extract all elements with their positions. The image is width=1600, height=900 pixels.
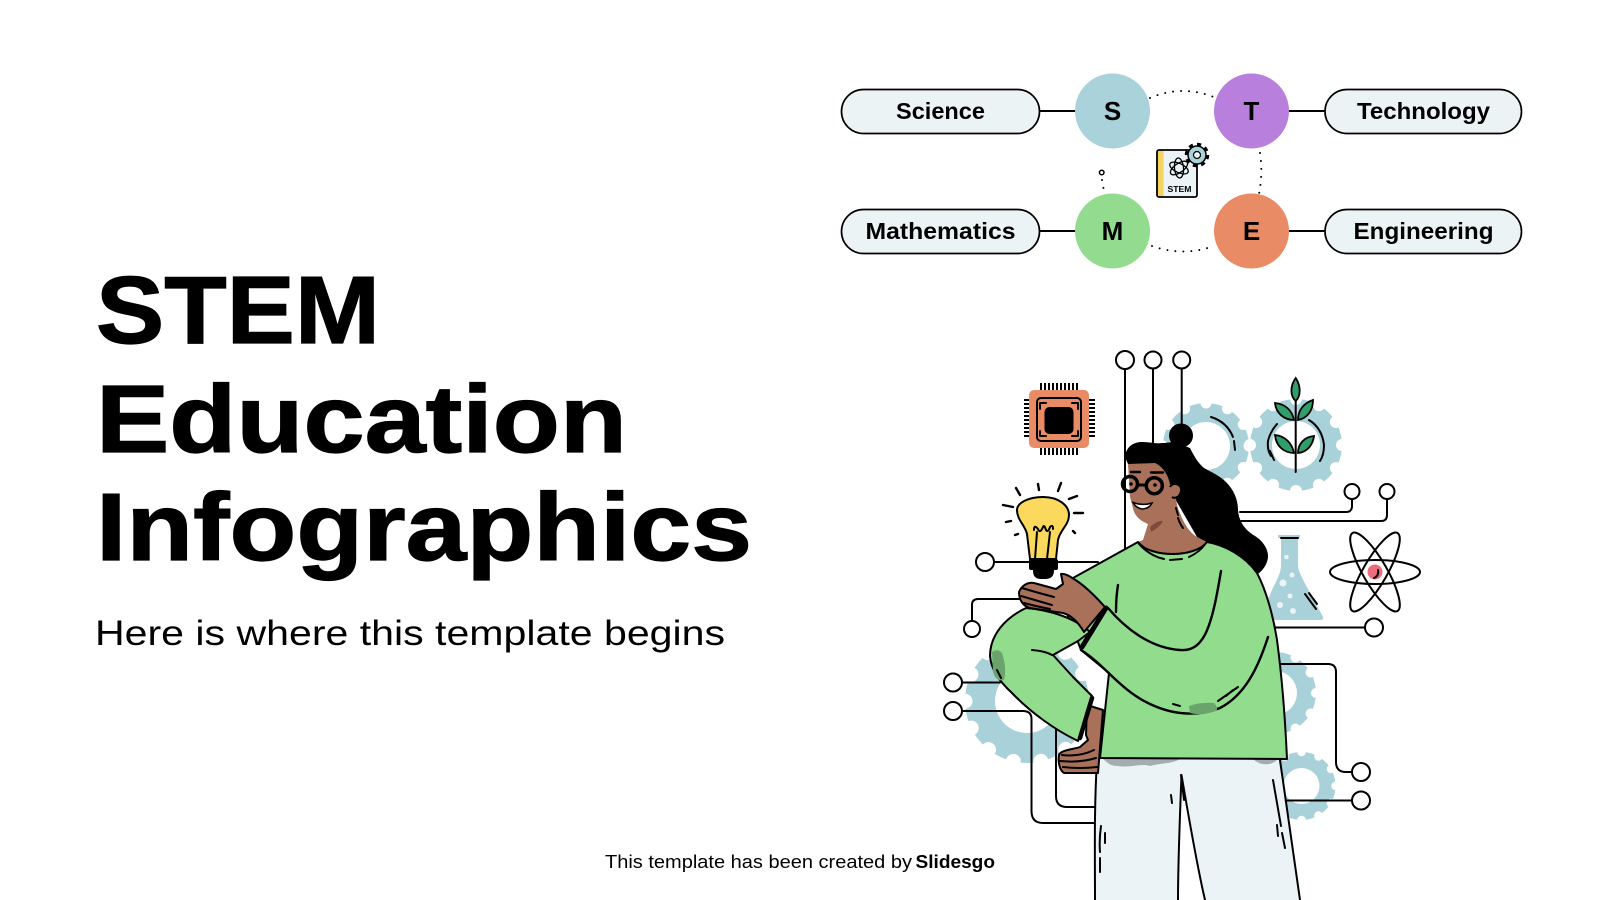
circuit lines and nodes xyxy=(944,351,1394,823)
circle: T xyxy=(1214,74,1289,148)
STEM acronym diagram xyxy=(842,74,1522,268)
person: sleeve fold xyxy=(1108,571,1221,650)
circle: S: S xyxy=(1104,96,1121,126)
footer credit: Slidesgo xyxy=(916,851,995,872)
person: hair bun xyxy=(1169,424,1193,448)
title: Education xyxy=(96,366,627,473)
person: green arm xyxy=(990,608,1092,741)
gear: right lower xyxy=(1268,752,1336,820)
person: neck and face xyxy=(1128,463,1207,554)
person: hair back xyxy=(1125,442,1268,575)
person: pants xyxy=(1095,755,1300,900)
subtitle: Here is where this template begins xyxy=(95,614,725,653)
circle: S xyxy=(1075,74,1150,148)
gear: plant xyxy=(1250,399,1342,491)
gear: upper left xyxy=(1163,403,1249,489)
icon: atom xyxy=(1330,527,1420,617)
pill: Science: Science xyxy=(896,98,985,124)
pill: Mathematics xyxy=(842,210,1040,254)
illustration: person with STEM icons xyxy=(944,351,1420,900)
person: arm shading xyxy=(992,650,1052,680)
icon: STEM book xyxy=(1157,144,1208,197)
gear: right middle xyxy=(1234,652,1316,734)
person: shirt folds xyxy=(1081,637,1268,714)
person: collar xyxy=(1139,543,1206,560)
circle: M: M xyxy=(1102,216,1123,246)
connector lines xyxy=(1040,111,1325,231)
footer credit: This template has been created by xyxy=(605,851,913,872)
person: upper hand fingers xyxy=(1021,588,1054,609)
pill: Science xyxy=(842,90,1040,134)
icon: flask xyxy=(1262,535,1323,620)
gears xyxy=(965,399,1342,820)
pill: Engineering: Engineering xyxy=(1354,218,1494,244)
person: sleeve shading xyxy=(1173,687,1238,714)
circle: E: E xyxy=(1243,216,1260,246)
person: cuffs xyxy=(1080,698,1092,738)
icon: plant xyxy=(1268,378,1324,472)
icon: microchip xyxy=(1024,383,1095,455)
pill: Technology xyxy=(1325,90,1522,134)
person: upper hand xyxy=(1019,574,1105,632)
person: lower hand fingers xyxy=(1060,750,1097,768)
icon: STEM book: STEM xyxy=(1168,184,1192,194)
person: lower hand xyxy=(1059,705,1103,773)
dotted connectors xyxy=(1099,91,1261,252)
circle: T: T xyxy=(1244,96,1260,126)
person: wrist cuff xyxy=(1082,608,1106,647)
person: face details xyxy=(1122,472,1183,532)
person: green shirt body xyxy=(1058,542,1287,759)
title: Infographics xyxy=(96,474,752,581)
pill: Mathematics: Mathematics xyxy=(866,218,1016,244)
person: pants details xyxy=(1100,759,1285,872)
circle: E xyxy=(1214,194,1289,268)
pill: Technology: Technology xyxy=(1357,98,1490,124)
gear: lower left xyxy=(965,639,1089,763)
title: STEM xyxy=(96,257,380,364)
pill: Engineering xyxy=(1325,210,1522,254)
circle: M xyxy=(1075,194,1150,268)
icon: light bulb xyxy=(1003,483,1083,579)
title xyxy=(96,257,752,581)
